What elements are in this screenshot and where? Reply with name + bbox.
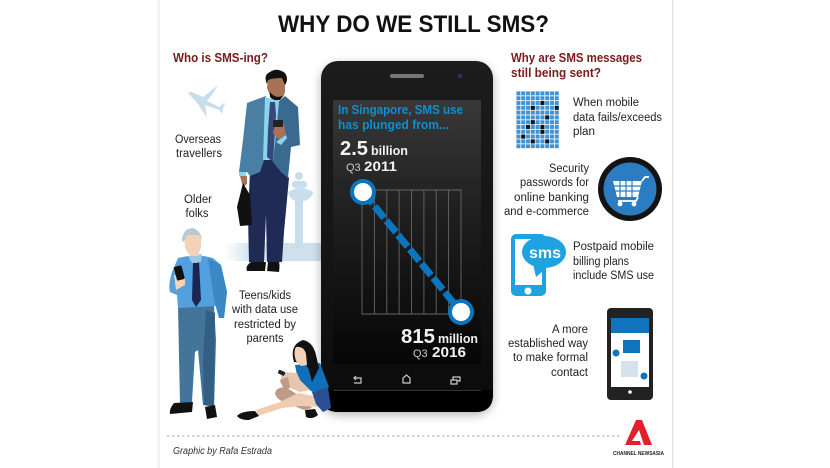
icon: sms phone: sms <box>529 245 561 262</box>
text: mobile data fails: When mobile <box>573 97 639 109</box>
stat: 815 million: Q3 <box>413 348 428 360</box>
label: teens and kids: restricted by <box>234 319 296 331</box>
face <box>294 347 307 366</box>
label: teens and kids: Teens/kids <box>239 290 291 302</box>
head <box>184 235 201 256</box>
icon: airplane <box>188 85 225 117</box>
text: security passwords: and e-commerce <box>504 206 589 218</box>
text: security passwords: Security <box>549 163 589 175</box>
screen <box>333 100 481 364</box>
phone: main smartphone <box>321 61 493 415</box>
trousers <box>248 160 289 262</box>
jacket right panel <box>273 96 300 178</box>
logo: channel newsasia <box>613 420 664 457</box>
figure: businessman <box>237 70 300 272</box>
heading: why are SMS messages <box>511 50 642 80</box>
label: older folks: Older <box>184 194 212 206</box>
hair <box>293 340 319 382</box>
cuff, hand and briefcase <box>239 172 246 176</box>
stat: 2.5 billion: Q3 <box>346 162 361 174</box>
text: postpaid plans: billing plans <box>573 256 629 268</box>
icon: data pixel grid <box>516 91 559 149</box>
stat: 815 million: 2016 <box>432 345 466 361</box>
shirt <box>169 256 227 318</box>
hand and phone <box>174 275 185 290</box>
stat: 2.5 billion: 2.5 <box>340 138 368 160</box>
label: older folks: folks <box>186 208 209 220</box>
phone body <box>321 61 493 412</box>
text: mobile data fails: plan <box>573 126 595 138</box>
heading: in Singapore: In Singapore, SMS use <box>338 102 463 117</box>
text: postpaid plans: include SMS use <box>573 270 654 282</box>
chart: line decline <box>350 179 474 325</box>
icon: sms phone <box>511 234 566 296</box>
heading: who is SMS-ing: Who is SMS-ing? <box>173 50 268 65</box>
icon: messaging phone <box>607 308 653 400</box>
phone nav buttons <box>354 375 460 384</box>
label: teens and kids: with data use <box>231 304 298 316</box>
heading: in Singapore <box>338 102 463 132</box>
text: security passwords <box>504 163 589 218</box>
heading: why are SMS messages: Why are SMS messages <box>511 50 642 65</box>
credit: Graphic by Rafa Estrada <box>173 445 272 457</box>
shirt <box>263 97 279 160</box>
text: formal contact: to make formal <box>513 352 588 364</box>
divider <box>167 435 621 437</box>
speaker <box>390 74 424 78</box>
figure: girl sitting <box>237 340 331 420</box>
hand and phone <box>273 124 286 140</box>
stat: 815 million <box>401 326 478 361</box>
text: security passwords: passwords for <box>520 177 589 189</box>
text: formal contact: contact <box>551 367 589 379</box>
collar <box>188 254 202 263</box>
heading: in Singapore: has plunged from... <box>338 117 449 132</box>
text: mobile data fails <box>573 97 662 138</box>
title: WHY DO WE STILL SMS? <box>278 11 549 38</box>
tie <box>267 102 276 162</box>
jacket left panel <box>239 96 266 176</box>
text: security passwords: online banking <box>514 192 589 204</box>
stat: 2.5 billion <box>340 138 408 174</box>
background: changi tower and ground <box>224 172 321 261</box>
stat: 815 million: million <box>438 332 478 346</box>
label: teens and kids: parents <box>246 333 284 345</box>
icon: shopping cart <box>598 157 662 221</box>
label: teens and kids <box>231 290 298 345</box>
text: formal contact: A more <box>552 324 588 336</box>
trousers <box>178 306 216 407</box>
figure: older man <box>169 228 227 419</box>
text: postpaid plans: Postpaid mobile <box>573 241 654 253</box>
stat: 2.5 billion: 2011 <box>364 158 397 174</box>
head <box>267 78 285 100</box>
camera <box>458 74 462 78</box>
arms and phone <box>280 372 310 392</box>
text: postpaid plans <box>573 241 654 282</box>
tie <box>192 262 201 307</box>
front leg <box>256 393 322 416</box>
label: overseas travellers: travellers <box>176 148 222 160</box>
shirt <box>295 363 329 392</box>
heading: why are SMS messages: still being sent? <box>511 65 601 80</box>
text: formal contact <box>508 324 589 379</box>
label: older folks <box>184 194 212 220</box>
text: formal contact: established way <box>508 338 588 350</box>
stat: 2.5 billion: billion <box>371 144 408 158</box>
stat: 815 million: 815 <box>401 326 435 348</box>
back leg <box>275 388 312 410</box>
label: overseas travellers <box>175 134 222 160</box>
shorts <box>312 387 331 412</box>
text: mobile data fails: data fails/exceeds <box>573 112 662 124</box>
logo: channel newsasia: CHANNEL NEWSASIA <box>613 451 664 457</box>
label: overseas travellers: Overseas <box>175 134 221 146</box>
